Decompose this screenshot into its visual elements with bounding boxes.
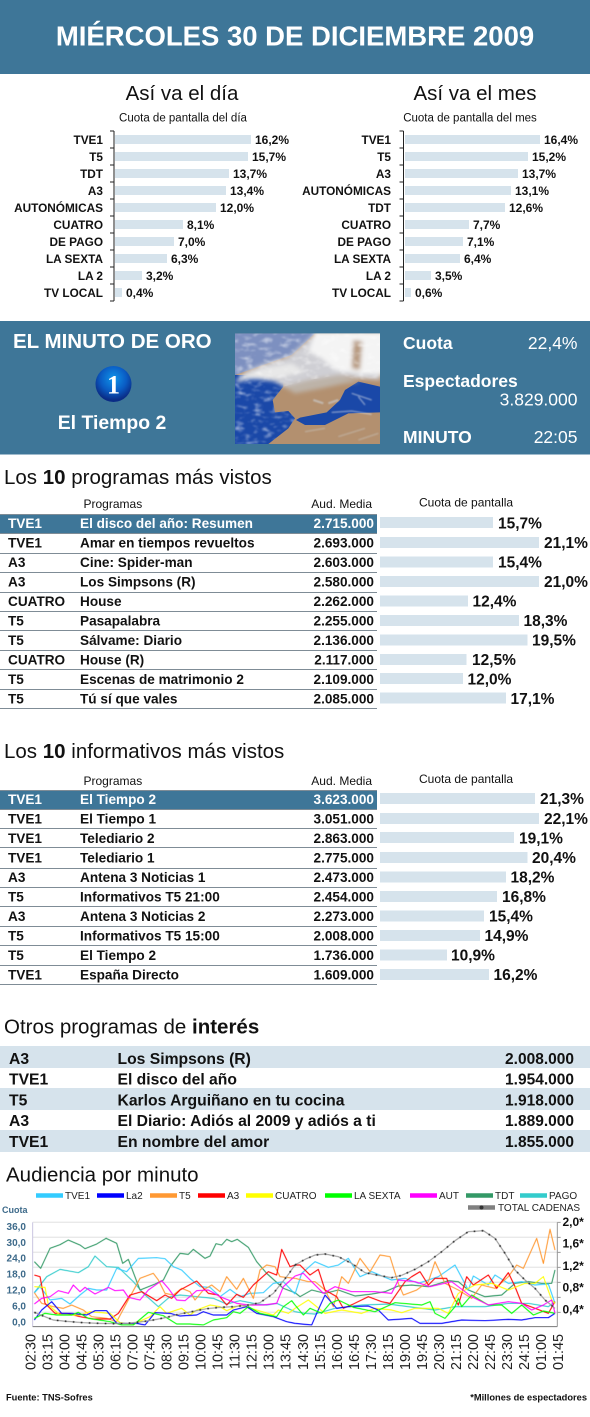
x axis time labels: 07:00 xyxy=(126,1334,142,1370)
x axis time labels: 16:45 xyxy=(347,1334,363,1370)
table rows: informativos: Informativos T5 15:00 xyxy=(80,928,220,944)
table rows: programas: Sálvame: Diario xyxy=(80,633,182,648)
table header: programas: Cuota de pantalla xyxy=(419,496,513,510)
bar chart: día: 8,1% xyxy=(187,218,215,232)
heading: así va el mes: Así va el mes xyxy=(413,82,537,105)
bar chart: mes: 7,7% xyxy=(473,218,501,232)
table rows: otros: 1.954.000 xyxy=(505,1072,574,1088)
table header: programas: Aud. Media xyxy=(311,497,372,511)
bar chart: mes: 0,6% xyxy=(415,286,443,300)
right axis values xyxy=(562,1215,584,1316)
table header: informativos: Cuota de pantalla xyxy=(419,772,513,786)
bar chart: día: 0,4% xyxy=(126,286,154,300)
bar chart: informativos: 18,2% xyxy=(510,870,555,886)
bar chart: mes: TDT xyxy=(368,201,392,215)
table header: informativos: Aud. Media xyxy=(311,774,372,788)
series: AUT xyxy=(34,1273,555,1313)
stat: cuota: Cuota xyxy=(403,333,453,353)
table header: informativos: Programas xyxy=(84,774,142,788)
table rows: informativos: Antena 3 Noticias 2 xyxy=(80,909,206,924)
bar chart: programas: 15,4% xyxy=(498,554,542,572)
bar chart: día: LA 2 xyxy=(78,269,103,283)
bar chart: programas: 21,1% xyxy=(544,535,588,552)
table rows: otros: TVE1 xyxy=(9,1072,49,1088)
table rows: informativos: TVE1 xyxy=(8,850,42,866)
table rows: informativos: Telediario 2 xyxy=(80,831,155,846)
bar chart: día: 3,2% xyxy=(146,269,174,283)
table rows: informativos: El Tiempo 2 xyxy=(80,948,156,963)
bar chart: día: T5 xyxy=(89,150,103,164)
stat: minuto: MINUTO xyxy=(403,427,472,447)
left axis values xyxy=(7,1222,26,1328)
left axis values: 18,0 xyxy=(7,1270,26,1280)
bar chart: día: 6,3% xyxy=(171,252,199,266)
x axis time labels: 07:45 xyxy=(142,1334,158,1370)
striped row bands xyxy=(0,1046,590,1152)
bar chart: día: 13,7% xyxy=(233,167,267,181)
x axis time labels: 17:30 xyxy=(364,1334,380,1370)
bar chart: informativos xyxy=(380,791,588,984)
x axis time labels: 06:15 xyxy=(108,1334,124,1370)
right axis values: 0,4* xyxy=(562,1302,584,1316)
bar chart: día xyxy=(14,133,289,300)
table rows: programas: CUATRO xyxy=(8,652,65,668)
table rows: informativos: Telediario 1 xyxy=(80,850,155,866)
table rows: programas: 2.255.000 xyxy=(314,614,374,628)
bar chart: mes: 12,6% xyxy=(509,201,543,215)
table rows: informativos: 2.008.000 xyxy=(314,928,374,944)
bar chart: mes: CUATRO xyxy=(341,218,391,232)
x axis time labels: 12:15 xyxy=(244,1334,260,1370)
satellite image xyxy=(235,332,385,444)
table rows: programas: T5 xyxy=(8,672,24,687)
series: LA SEXTA xyxy=(34,1295,555,1325)
x axis time labels: 11:30 xyxy=(228,1334,244,1369)
table rows: programas: House (R) xyxy=(80,652,144,668)
table rows: programas: 2.085.000 xyxy=(314,692,374,706)
left axis values: 6,0 xyxy=(12,1302,26,1312)
table rows: programas: Pasapalabra xyxy=(80,614,161,628)
bar chart: mes: 3,5% xyxy=(435,269,463,283)
table rows: programas: 2.693.000 xyxy=(314,536,374,550)
table rows: informativos: T5 xyxy=(8,890,24,904)
panel: los 10 programas más vistos xyxy=(0,466,588,708)
table rows: programas: House xyxy=(80,594,122,609)
legend: La2 xyxy=(126,1191,143,1202)
bar chart: día: LA SEXTA xyxy=(46,252,103,266)
table rows: programas: Los Simpsons (R) xyxy=(80,574,196,590)
table rows: otros: A3 xyxy=(9,1051,29,1068)
legend: AUT xyxy=(439,1191,459,1202)
table rows: programas: 2.603.000 xyxy=(314,555,374,570)
legend: TOTAL CADENAS xyxy=(498,1203,580,1214)
table rows: otros: 1.855.000 xyxy=(505,1134,574,1151)
bar chart: mes: LA 2 xyxy=(366,269,391,283)
table rows: informativos: 3.051.000 xyxy=(314,812,374,826)
series: TVE1 xyxy=(34,1258,555,1304)
heading: otros programas: Otros programas de interés xyxy=(4,1016,259,1038)
x axis time labels: 08:30 xyxy=(160,1334,176,1370)
table rows: programas: Cine: Spider-man xyxy=(80,555,193,570)
x axis time labels: 23:30 xyxy=(500,1334,516,1370)
highlighted row band xyxy=(0,515,377,534)
table rows: otros: Los Simpsons (R) xyxy=(118,1051,251,1068)
stat: cuota xyxy=(403,333,578,353)
x axis time labels: 10:45 xyxy=(210,1334,226,1370)
legend: PAGO xyxy=(549,1191,577,1202)
panel: así va el mes xyxy=(302,82,578,301)
table rows: informativos: TVE1 xyxy=(8,831,42,846)
x axis time labels: 01:45 xyxy=(551,1334,567,1370)
bar chart: informativos: 21,3% xyxy=(540,791,584,808)
bar chart: informativos: 20,4% xyxy=(532,850,576,867)
table rows: informativos: TVE1 xyxy=(8,968,42,982)
table rows: programas: Escenas de matrimonio 2 xyxy=(80,672,244,687)
right axis values: 0,8* xyxy=(562,1280,584,1294)
x axis time labels: 16:00 xyxy=(330,1334,346,1370)
left axis values: 24,0 xyxy=(7,1254,26,1264)
table rows: programas: T5 xyxy=(8,633,24,648)
bar chart: mes: 16,4% xyxy=(544,133,578,147)
table rows: informativos: 1.609.000 xyxy=(314,968,374,982)
table rows: programas: 2.109.000 xyxy=(314,672,374,687)
bar chart: programas: 15,7% xyxy=(498,516,542,532)
table rows: programas: T5 xyxy=(8,692,24,706)
source note: Fuente: TNS-Sofres xyxy=(6,1392,93,1402)
table rows: informativos: A3 xyxy=(8,909,26,924)
subtitle: cuota del día: Cuota de pantalla del día xyxy=(119,112,248,124)
bar chart: mes: AUTONÓMICAS xyxy=(302,184,391,198)
left axis values: 36,0 xyxy=(7,1222,26,1233)
table rows: otros: A3 xyxy=(9,1113,29,1130)
x axis time labels: 13:45 xyxy=(278,1334,294,1370)
heading: el minuto de oro: EL MINUTO DE ORO xyxy=(13,330,212,353)
table rows: informativos: TVE1 xyxy=(8,812,42,826)
table rows: informativos: 2.454.000 xyxy=(314,890,374,904)
bar chart: programas: 19,5% xyxy=(532,632,576,650)
table rows: programas: A3 xyxy=(8,574,26,590)
table header: programas xyxy=(84,496,513,511)
table rows: otros: 2.008.000 xyxy=(505,1051,574,1068)
left axis values: 12,0 xyxy=(7,1286,26,1296)
bar chart: día: 13,4% xyxy=(230,184,264,198)
bar chart: informativos: 16,2% xyxy=(494,967,538,984)
bar chart: mes: 13,1% xyxy=(515,184,549,198)
table rows: informativos: 2.863.000 xyxy=(314,831,374,846)
legend: T5 xyxy=(179,1191,191,1202)
bar chart: mes: T5 xyxy=(377,150,391,164)
series: PAGO xyxy=(34,1256,555,1314)
bar chart: informativos: 14,9% xyxy=(484,928,529,945)
x axis time labels: 19:00 xyxy=(398,1334,414,1370)
bar chart: día: 12,0% xyxy=(220,201,254,215)
table rows: informativos: El Tiempo 1 xyxy=(80,812,156,826)
x axis time labels: 14:30 xyxy=(296,1334,312,1370)
table rows: programas: El disco del año: Resumen xyxy=(80,516,253,531)
series: TDT xyxy=(34,1238,555,1297)
program name: El Tiempo 2 xyxy=(58,412,166,434)
x axis time labels: 24:15 xyxy=(517,1334,533,1370)
bar chart: informativos: 16,8% xyxy=(502,889,546,906)
title: MIÉRCOLES 30 DE DICIEMBRE 2009 xyxy=(56,20,534,52)
table rows: programas: 2.262.000 xyxy=(314,594,374,609)
bar chart: mes xyxy=(302,133,578,300)
right axis values: 1,6* xyxy=(562,1236,584,1250)
heading: audiencia por minuto: Audiencia por minuto xyxy=(6,1164,199,1186)
stat: espectadores xyxy=(403,371,578,410)
legend: TDT xyxy=(495,1191,514,1202)
bar chart: informativos: 10,9% xyxy=(451,948,495,964)
panel: otros programas de interés xyxy=(0,1016,590,1152)
table rows: otros: 1.889.000 xyxy=(505,1113,574,1130)
header banner xyxy=(0,0,590,74)
bar chart: día: TV LOCAL xyxy=(44,286,103,300)
table rows: informativos: 2.473.000 xyxy=(314,870,374,885)
x axis time labels: 22:45 xyxy=(483,1334,499,1370)
bar chart: mes: DE PAGO xyxy=(337,235,391,249)
icon: logo TVE1: 1 xyxy=(107,370,120,400)
footnote: *Millones de espectadores xyxy=(470,1392,587,1402)
left axis values: 30,0 xyxy=(7,1238,26,1249)
table rows: otros: 1.918.000 xyxy=(505,1092,574,1110)
bar chart: día: TDT xyxy=(80,167,104,181)
right axis values: 2,0* xyxy=(562,1215,584,1229)
table header: informativos xyxy=(84,772,513,788)
x axis time labels: 04:00 xyxy=(58,1334,74,1370)
bar chart: mes: 6,4% xyxy=(464,252,492,266)
bar chart: día: AUTONÓMICAS xyxy=(14,201,103,215)
bar chart: mes: A3 xyxy=(376,167,391,181)
x axis time labels: 02:30 xyxy=(24,1334,40,1370)
stat: espectadores: 3.829.000 xyxy=(500,390,578,410)
table rows: programas: TVE1 xyxy=(8,536,42,550)
x axis time labels: 10:00 xyxy=(194,1334,210,1370)
line chart xyxy=(33,1222,561,1327)
table rows: programas: T5 xyxy=(8,614,24,628)
subtitle: cuota del mes: Cuota de pantalla del mes xyxy=(403,112,537,124)
y axis label: cuota: Cuota xyxy=(2,1205,28,1215)
bar chart: mes: TV LOCAL xyxy=(332,286,391,300)
bar chart: día: A3 xyxy=(88,184,103,198)
x axis time labels: 18:15 xyxy=(381,1334,397,1370)
table rows: programas: 2.117.000 xyxy=(314,652,374,668)
bar chart: informativos: 22,1% xyxy=(544,811,588,828)
bar chart: programas: 12,5% xyxy=(472,652,516,669)
table rows: otros: En nombre del amor xyxy=(118,1134,269,1151)
table rows: otros: Karlos Arguiñano en tu cocina xyxy=(118,1092,345,1110)
table rows: informativos: Antena 3 Noticias 1 xyxy=(80,870,206,885)
bar chart: informativos: 15,4% xyxy=(489,908,533,926)
table rows: programas: Amar en tiempos revueltos xyxy=(80,536,255,550)
x axis time labels: 03:15 xyxy=(40,1334,56,1370)
legend xyxy=(36,1191,580,1214)
series: T5 xyxy=(34,1229,555,1322)
x axis time labels: 09:15 xyxy=(176,1334,192,1370)
left axis values: 0,0 xyxy=(12,1318,26,1328)
legend: TVE1 xyxy=(65,1191,90,1202)
bar chart: programas: 17,1% xyxy=(510,691,555,708)
bar chart: mes: LA SEXTA xyxy=(334,252,391,266)
x axis time labels xyxy=(24,1334,567,1370)
x axis time labels: 21:15 xyxy=(449,1334,465,1370)
x axis time labels: 04:45 xyxy=(74,1334,90,1370)
x axis time labels: 22:00 xyxy=(466,1334,482,1370)
table rows: otros: T5 xyxy=(9,1092,28,1110)
table rows: informativos: España Directo xyxy=(80,968,179,982)
table rows: otros xyxy=(9,1051,574,1151)
series: A3 xyxy=(34,1249,555,1319)
table rows: otros: El Diario: Adiós al 2009 y adiós a ti xyxy=(118,1113,376,1130)
table rows: informativos: El Tiempo 2 xyxy=(80,792,156,807)
bar chart: mes: 7,1% xyxy=(467,235,495,249)
series: CUATRO xyxy=(34,1277,555,1324)
legend: A3 xyxy=(227,1191,240,1202)
axis: mes xyxy=(400,131,404,301)
x axis time labels: 19:45 xyxy=(415,1334,431,1370)
table rows: programas xyxy=(0,514,377,708)
stat: minuto: 22:05 xyxy=(534,427,578,447)
bar chart: día: CUATRO xyxy=(53,218,103,232)
series: La2 xyxy=(34,1295,555,1325)
axis: día xyxy=(110,131,114,301)
right axis values: 1,2* xyxy=(562,1259,584,1273)
bar chart: día: 16,2% xyxy=(255,133,289,147)
table rows: otros: El disco del año xyxy=(118,1072,237,1088)
table rows: informativos: T5 xyxy=(8,948,24,963)
bar chart: programas: 12,4% xyxy=(472,594,517,610)
bar chart: día: TVE1 xyxy=(73,133,103,147)
table rows: otros: TVE1 xyxy=(9,1134,49,1151)
table rows: informativos: 1.736.000 xyxy=(314,948,374,963)
table rows: informativos: T5 xyxy=(8,928,24,944)
bar chart: día: 15,7% xyxy=(252,150,286,164)
table rows: programas: A3 xyxy=(8,555,26,570)
bar chart: día: DE PAGO xyxy=(49,235,103,249)
table rows: programas: 2.136.000 xyxy=(314,633,374,648)
heading: así va el día: Así va el día xyxy=(126,82,239,105)
bar chart: mes: TVE1 xyxy=(361,133,391,147)
panel: audiencia por minuto xyxy=(2,1164,584,1370)
stat: cuota: 22,4% xyxy=(528,333,578,353)
bar chart: mes: 15,2% xyxy=(532,150,566,164)
panel: el minuto de oro xyxy=(0,321,590,454)
table rows: informativos: 3.623.000 xyxy=(314,792,374,807)
table rows: informativos xyxy=(0,790,377,984)
table rows: informativos: 2.273.000 xyxy=(314,909,374,924)
table rows: programas: TVE1 xyxy=(8,516,42,531)
icon: logo TVE1 xyxy=(96,366,132,402)
table rows: programas: Tú sí que vales xyxy=(80,692,177,706)
table rows: informativos: 2.775.000 xyxy=(314,850,374,866)
bar chart: programas: 21,0% xyxy=(544,574,588,591)
table rows: informativos: TVE1 xyxy=(8,792,42,807)
bar chart: día: 7,0% xyxy=(178,235,206,249)
x axis time labels: 15:15 xyxy=(313,1334,329,1370)
panel: los 10 informativos más vistos xyxy=(0,740,588,984)
x axis time labels: 20:30 xyxy=(432,1334,448,1370)
stat: espectadores: Espectadores xyxy=(403,371,518,391)
bar chart: programas xyxy=(380,516,588,708)
highlighted row band xyxy=(0,790,377,810)
table rows: programas: 2.580.000 xyxy=(314,574,374,590)
series: TOTAL CADENAS xyxy=(34,1231,555,1324)
x axis time labels: 13:00 xyxy=(262,1334,278,1370)
bar chart: mes: 13,7% xyxy=(522,167,556,181)
bar chart: programas: 12,0% xyxy=(468,672,512,688)
bar chart: informativos: 19,1% xyxy=(519,830,563,848)
table rows: informativos: A3 xyxy=(8,870,26,885)
table rows: informativos: Informativos T5 21:00 xyxy=(80,890,220,904)
heading: informativos: Los 10 informativos más vistos xyxy=(4,740,284,763)
legend: LA SEXTA xyxy=(354,1191,401,1202)
heading: programas: Los 10 programas más vistos xyxy=(4,466,272,489)
bar chart: programas: 18,3% xyxy=(524,613,568,630)
stat: minuto xyxy=(403,427,578,447)
table rows: programas: 2.715.000 xyxy=(314,516,374,531)
x axis time labels: 05:30 xyxy=(92,1334,108,1370)
table header: programas: Programas xyxy=(84,497,142,511)
table rows: programas: CUATRO xyxy=(8,594,65,609)
panel: así va el día xyxy=(14,82,289,301)
legend: CUATRO xyxy=(275,1191,317,1202)
x axis time labels: 01:00 xyxy=(534,1334,550,1370)
